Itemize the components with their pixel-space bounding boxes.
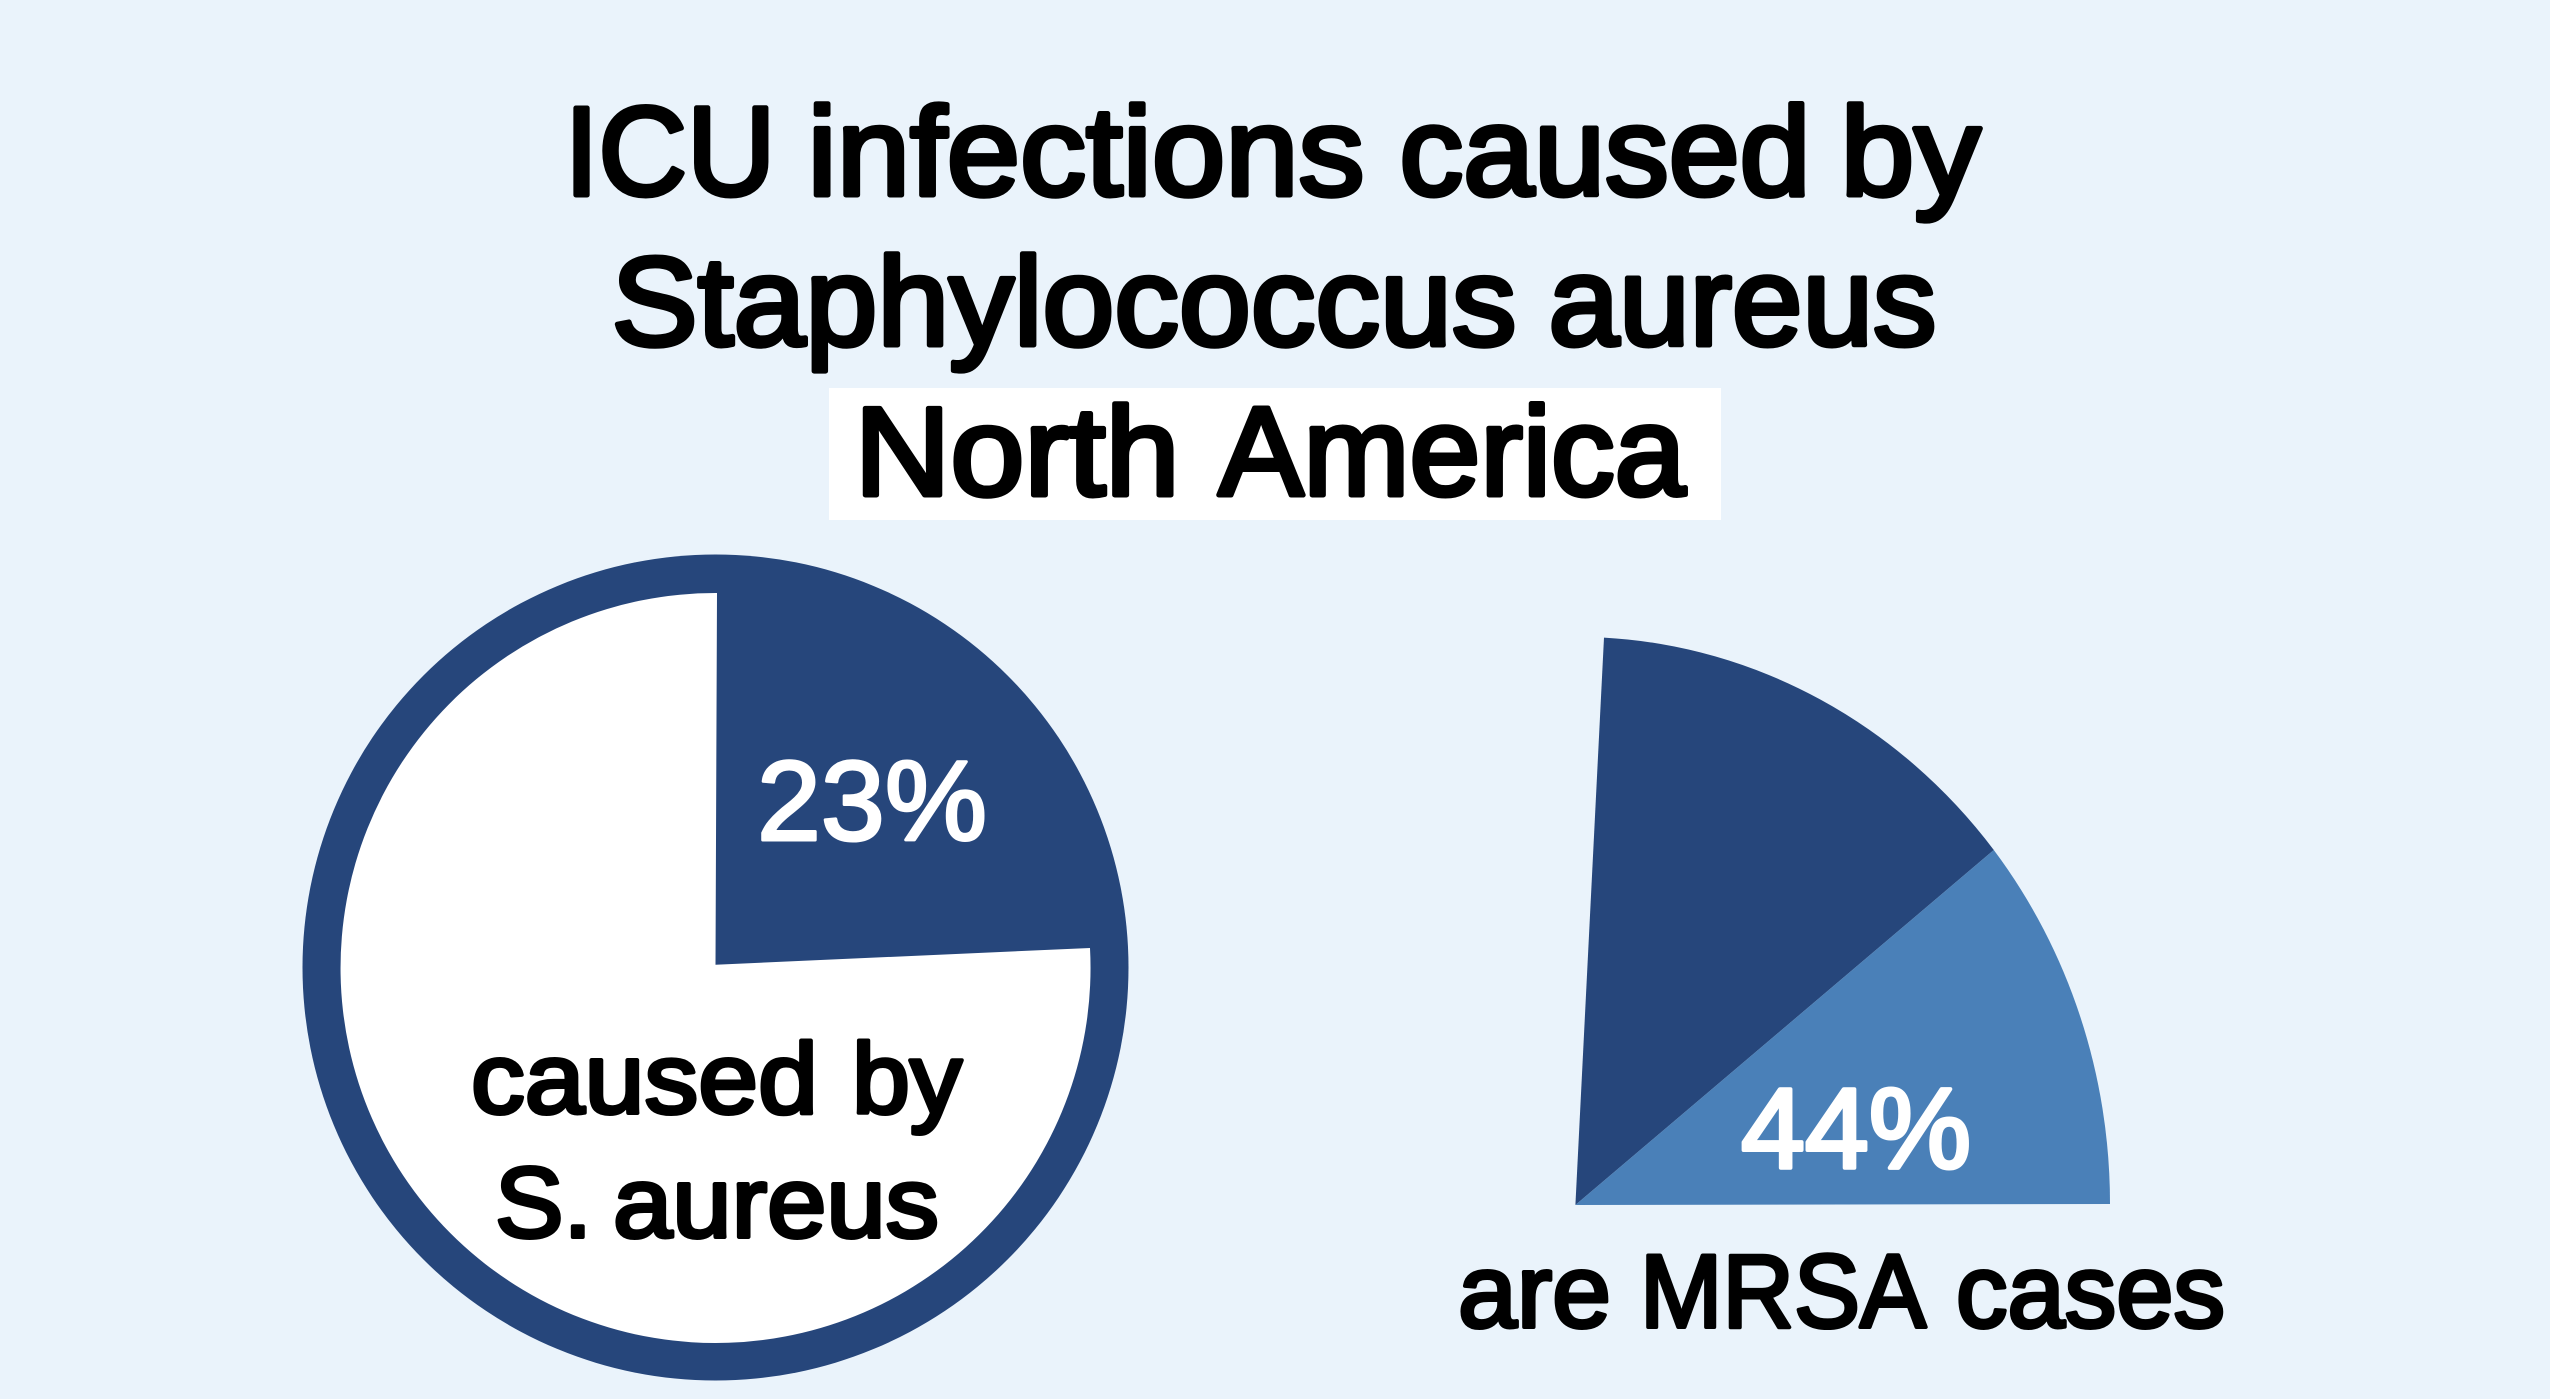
fan light segment xyxy=(1575,850,2110,1205)
pie caption: by xyxy=(852,1023,962,1135)
title line 1: caused xyxy=(1400,81,1810,222)
pie ring and 23% slice xyxy=(302,554,1128,1380)
title line 1: infections xyxy=(808,81,1364,222)
pie caption: aureus xyxy=(613,1147,939,1259)
fan dark segment xyxy=(1575,638,1994,1205)
value: 23%: 23% xyxy=(757,738,987,864)
region label: North America: North xyxy=(854,381,1180,522)
pie caption: caused xyxy=(471,1023,818,1135)
title line 1: ICU xyxy=(564,81,776,222)
pie remainder slice xyxy=(341,593,1091,1343)
fan caption xyxy=(1458,1234,2225,1350)
pie chart: caused by S. aureus xyxy=(302,554,1128,1380)
fan caption: are xyxy=(1458,1234,1611,1350)
value: 44%: 44% xyxy=(1741,1066,1971,1193)
title line 1 xyxy=(564,81,1980,222)
title xyxy=(564,81,1980,522)
title line 1: by xyxy=(1840,81,1980,222)
fan caption: cases xyxy=(1956,1234,2225,1350)
region label: North America xyxy=(829,381,1721,522)
pie caption: S. xyxy=(495,1147,592,1259)
region label: North America: America xyxy=(1218,381,1686,522)
fan caption: MRSA xyxy=(1640,1234,1927,1350)
title line 2: aureus xyxy=(1548,231,1936,372)
title line 2: Staphylococcus xyxy=(612,231,1516,372)
pie caption xyxy=(471,1023,962,1259)
fan chart: MRSA share xyxy=(1458,638,2225,1350)
title line 2 xyxy=(612,231,1936,372)
